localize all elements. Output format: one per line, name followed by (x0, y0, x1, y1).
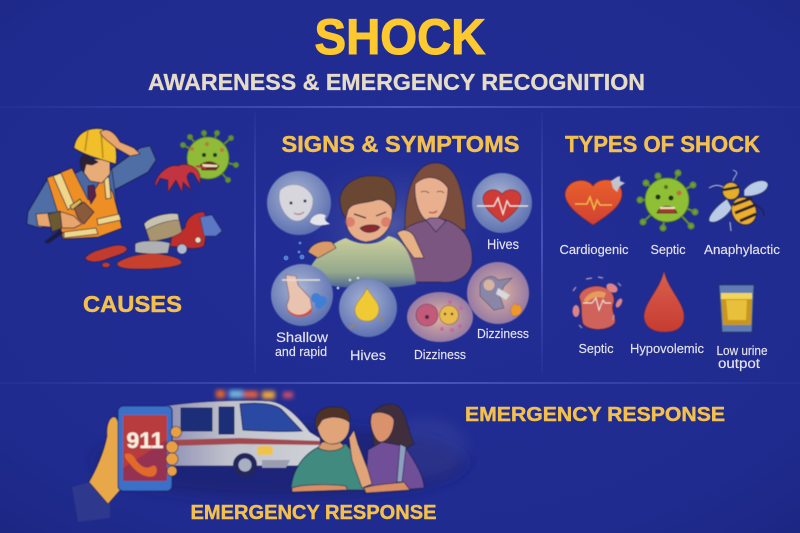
heading: types of shock: TYPES OF SHOCK (565, 131, 760, 157)
panel: causes (27, 129, 238, 269)
icon: lungs and nasal airway (271, 264, 333, 326)
label: hives: Hives (350, 347, 386, 363)
panel: types of shock (560, 131, 781, 371)
heading: emergency response right: EMERGENCY RESPONSE (465, 404, 725, 426)
icon: virus and red creature (155, 131, 238, 192)
panel: signs and symptoms (267, 131, 532, 363)
title: SHOCK (314, 9, 486, 65)
icon: virus (638, 170, 698, 230)
icon: bee (709, 170, 768, 231)
label: shallow and rapid: Shallow (276, 329, 329, 345)
icon: dizzy figure and flame (467, 262, 529, 324)
panel: emergency response (72, 390, 725, 524)
label: septic: Septic (578, 342, 614, 356)
subtitle: AWARENESS & EMERGENCY RECOGNITION (148, 69, 645, 95)
label: shallow and rapid: and rapid (275, 345, 327, 359)
label: hives: Hives (487, 237, 519, 252)
icon: construction worker (27, 129, 156, 243)
label: low urine output: Low urine (716, 344, 768, 358)
label: hypovolemic: Hypovolemic (630, 341, 704, 356)
icon: hand holding phone (72, 406, 182, 522)
icon: kidney with pulse (572, 277, 624, 330)
label: cardiogenic: Cardiogenic (560, 242, 629, 257)
icon: heart with pulse (472, 173, 532, 233)
heading: signs and symptoms: SIGNS & SYMPTOMS (282, 131, 520, 157)
breath droplets (336, 276, 378, 290)
icon: glass of urine (719, 285, 754, 332)
icon: pale face (267, 171, 331, 235)
label: shallow and rapid (275, 329, 329, 359)
label: anaphylactic: Anaphylactic (704, 242, 781, 257)
icon: blood drop (644, 271, 684, 332)
glow behind figures (287, 150, 497, 300)
label: low urine output: outpot (718, 356, 760, 371)
label: dizziness: Dizziness (477, 327, 529, 341)
label: septic: Septic (650, 243, 686, 257)
dark haze behind scene (95, 426, 465, 498)
icon: ambulance (165, 390, 322, 477)
icon: hand holding phone: 911 (126, 428, 164, 453)
icon: heart (565, 176, 625, 225)
label: low urine output (716, 344, 768, 371)
label: dizziness: Dizziness (414, 348, 466, 362)
icon: crushed wreck and blood (85, 212, 222, 269)
illustration: boy and caring woman (308, 163, 472, 288)
illustration: man and woman on phone (291, 404, 424, 493)
heading: causes: CAUSES (83, 291, 182, 317)
heading: emergency response bottom: EMERGENCY RESPONSE (190, 502, 436, 524)
icon: sweat drop (339, 279, 397, 337)
icon: skin rash (407, 292, 473, 342)
